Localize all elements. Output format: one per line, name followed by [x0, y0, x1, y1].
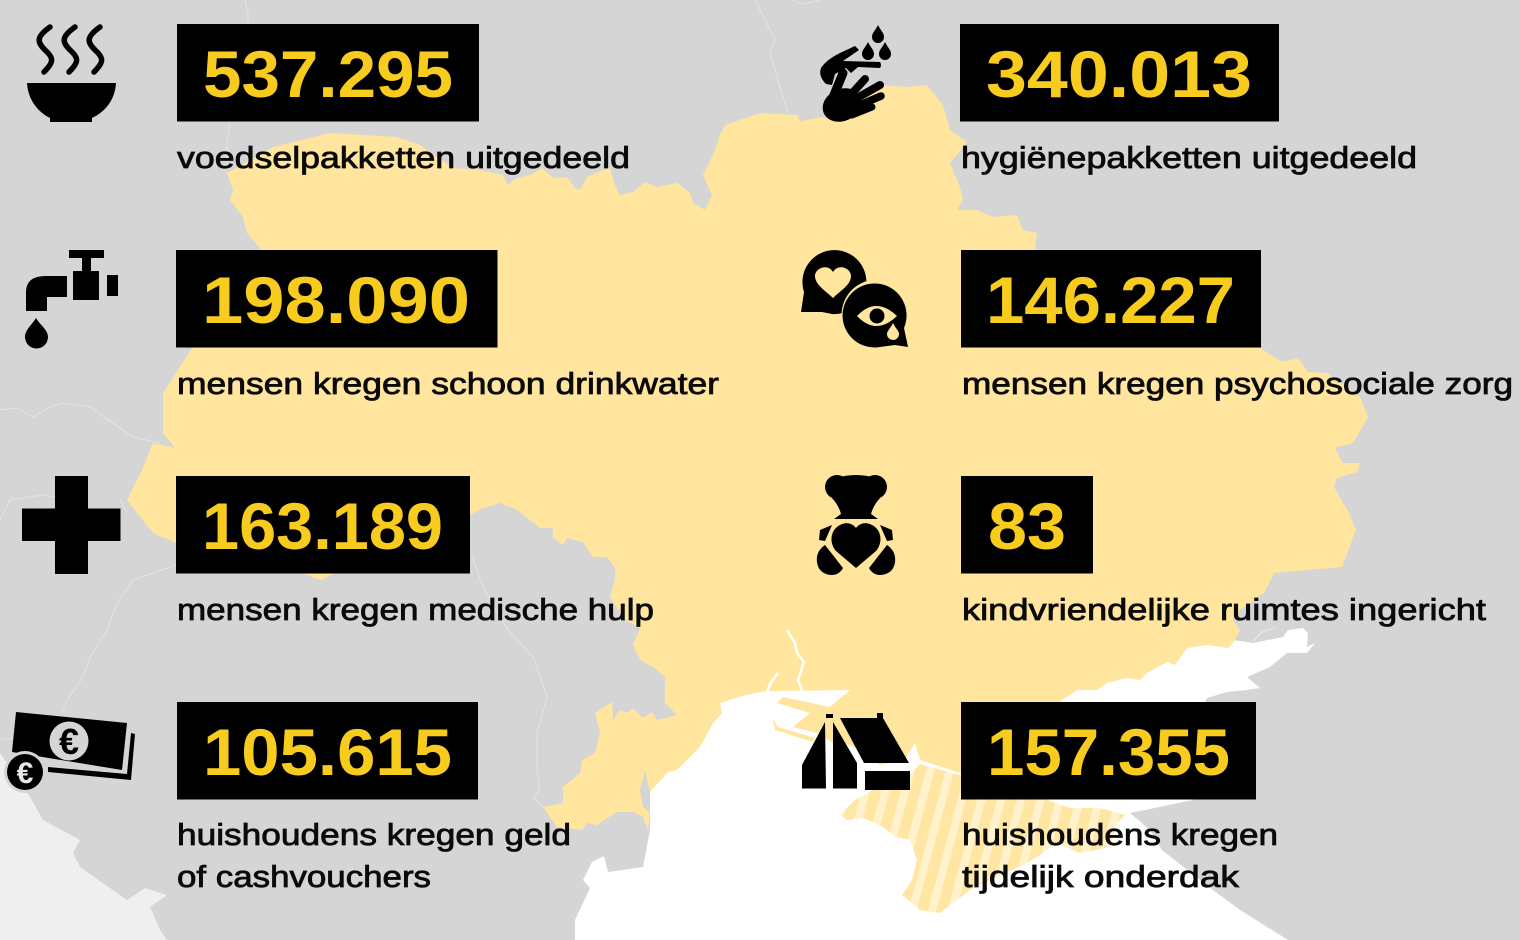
icon: speech bubbles with heart and crying eye	[801, 250, 912, 350]
icon: tent	[802, 713, 910, 790]
label: huishoudens kregen tijdelijk onderdak	[962, 817, 1278, 894]
number box: 83: 83	[988, 489, 1066, 563]
stat: food parcels	[27, 24, 630, 175]
label: voedselpakketten uitgedeeld: voedselpakketten uitgedeeld	[177, 140, 630, 175]
label: mensen kregen psychosociale zorg: mensen kregen psychosociale zorg	[962, 366, 1513, 401]
stat: temporary shelter	[802, 702, 1278, 894]
number box: 157.355	[961, 702, 1256, 800]
stat: drinking water	[25, 250, 719, 401]
number box: 83	[961, 476, 1093, 574]
icon: banknotes and coin: €	[59, 721, 79, 762]
stat: cash and vouchers	[4, 702, 571, 894]
label: kindvriendelijke ruimtes ingericht: kindvriendelijke ruimtes ingericht	[962, 592, 1486, 627]
label: hygiënepakketten uitgedeeld: hygiënepakketten uitgedeeld	[961, 140, 1417, 175]
label: mensen kregen medische hulp: mensen kregen medische hulp	[177, 592, 654, 627]
label: huishoudens kregen geld of cashvouchers	[177, 817, 571, 894]
number box: 340.013: 340.013	[986, 37, 1252, 111]
number box: 163.189	[176, 476, 470, 574]
icon: steaming bowl	[27, 27, 116, 122]
stat: medical help	[22, 476, 654, 627]
number box: 537.295	[177, 24, 479, 122]
number box: 146.227	[961, 250, 1261, 348]
number box: 146.227: 146.227	[986, 263, 1235, 337]
number box: 157.355: 157.355	[987, 715, 1230, 789]
number box: 340.013	[960, 24, 1279, 122]
icon: water tap	[25, 250, 118, 348]
stat: psychosocial care	[801, 250, 1513, 401]
icon: banknotes and coin: €	[17, 757, 34, 790]
number box: 163.189: 163.189	[202, 489, 443, 563]
icon: banknotes and coin	[4, 712, 135, 793]
icon: teddy bear with heart	[817, 475, 895, 575]
stat: hygiene parcels	[817, 24, 1417, 175]
stat: child-friendly spaces	[817, 475, 1486, 627]
icon: washing hands with drops	[817, 25, 891, 128]
icon: medical cross	[22, 476, 120, 574]
number box: 105.615	[177, 702, 478, 800]
label: huishoudens kregen geld of cashvouchers: huishoudens kregen geld	[177, 817, 571, 852]
number box: 537.295: 537.295	[203, 37, 453, 111]
number box: 198.090: 198.090	[202, 263, 470, 337]
number box: 105.615: 105.615	[203, 715, 452, 789]
label: huishoudens kregen tijdelijk onderdak: huishoudens kregen	[962, 817, 1278, 852]
label: huishoudens kregen geld of cashvouchers: of cashvouchers	[177, 859, 431, 894]
label: huishoudens kregen tijdelijk onderdak: tijdelijk onderdak	[962, 859, 1240, 894]
number box: 198.090	[176, 250, 498, 348]
label: mensen kregen schoon drinkwater: mensen kregen schoon drinkwater	[177, 366, 719, 401]
